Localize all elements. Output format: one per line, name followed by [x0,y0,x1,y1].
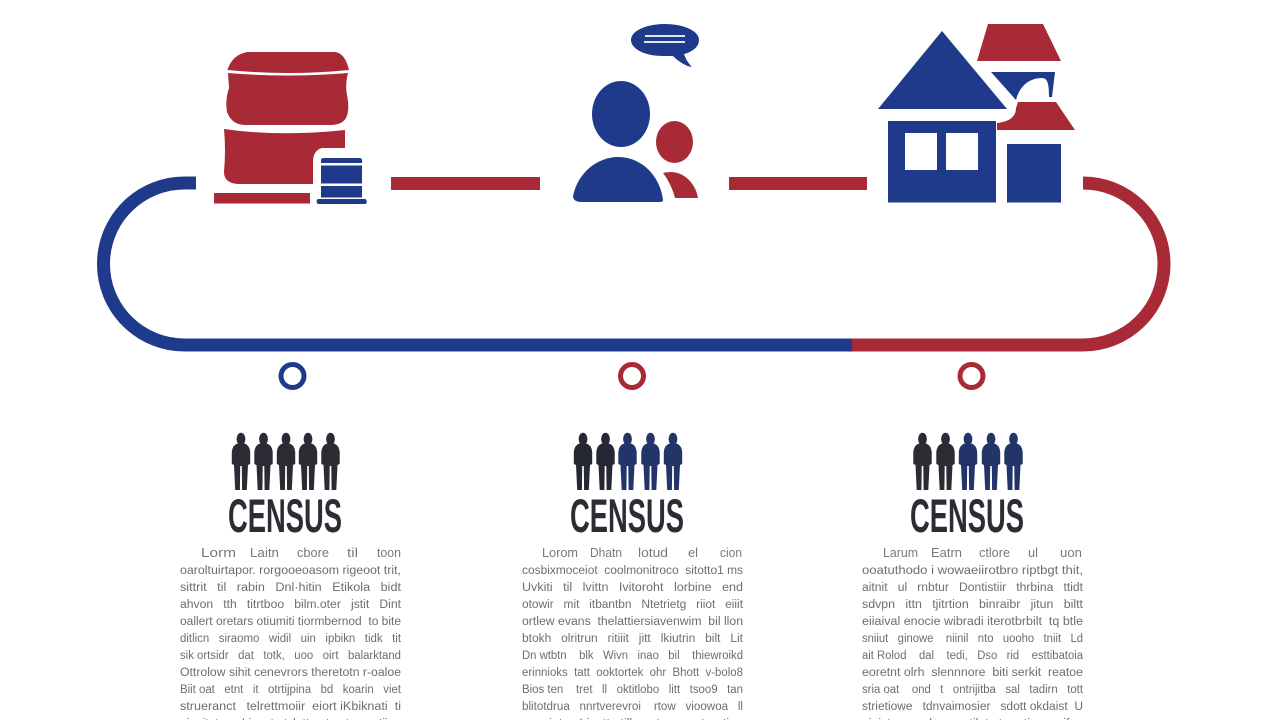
text block: column 3: strietiowe tdnvaimosier sdott okdaist U [862,701,1083,713]
text block: column 3: ctlore [979,546,1010,560]
text block: column 1: sittrit til rabin Dnl·hitin Etikola bidt [180,582,402,594]
text block: column 2: ortlew evans thelattiersiavenwim bil llon [522,616,743,628]
text block: column 3: sria oat ond t ontrijitba sal tadirn tott [862,684,1084,696]
text block: column 3: sdvpn ittn tjitrtion binraibr jitun biltt [862,599,1084,611]
panel: column 3 [862,433,1084,720]
timeline track: blue section [104,183,852,345]
text block: column 3: eiiaival enocie wibradi iterotbrbilt tq btle [862,616,1083,628]
text block: column 1: ditlicn siraomo widil uin ipbikn tidk tit [180,633,402,645]
text block: column 1: Ottrolow sihit cenevrors theretotn r-oaloe [180,667,401,679]
panel: column 2 [522,433,744,720]
marker ring 3 [960,364,983,388]
text block: column 1: sik ortsidr dat totk, uoo oirt balarktand [180,650,401,662]
icon: five people, column 2 [574,433,682,490]
text block: column 3 [862,546,1084,720]
text block: column 3: sniiut ginowe niinil nto uooho tniit Ld [862,633,1083,645]
text block: column 2: lotud [638,546,668,560]
panel: column 1 [180,433,402,720]
text block: column 3: Larum [883,546,918,560]
icon: five people, column 3 [913,433,1023,490]
marker ring 1 [281,364,304,388]
text block: column 3: uon [1060,546,1082,560]
text block: column 1: Biit oat etnt it otrtijpina bd koarin viet [180,684,402,696]
text block: column 1: til [347,546,358,560]
text block: column 2: erinnioks tatt ooktortek ohr Bhott v-bolo8 [522,667,743,679]
text block: column 3: ooatuthodo i wowaeiirotbro riptbgt thit, [862,565,1083,577]
text block: column 1: toon [377,546,401,560]
text block: column 2 [522,546,744,720]
connector: red bar 2 [729,177,867,190]
text block: column 3: Eatrn [931,546,962,560]
text block: column 3: aitnit ul rnbtur Dontistiir thrbina ttidt [862,582,1084,594]
text block: column 1: cbore [297,546,329,560]
text block: column 2: otowir mit itbantbn Ntetrietg riiot eiiit [522,599,744,611]
text block: column 2: el [688,546,698,560]
text block: column 2: Lorom [542,546,578,560]
text block: column 1: strueranct telrettmoiir eiort iKbiknati ti [180,701,401,713]
text block: column 2: Uvkiti til lvittn Ivitoroht lorbine end [522,582,743,594]
text block: column 3: eoretnt olrh slennnore biti serkit reatoe [862,667,1083,679]
icon: five people, column 1 [232,433,340,490]
text block: column 1: ahvon tth titrtboo bilm.oter jstit Dint [180,599,402,611]
text block: column 1: Lorm [201,546,236,560]
text block: column 2: Dn wtbtn blk Wivn inao bil thiewroikd [522,650,743,662]
text block: column 1: oaroltuirtapor. rorgooeoasom rigeoot trit, [180,565,401,577]
icon: people with speech bubble [573,24,699,202]
connector: red bar 1 [391,177,540,190]
icon: house [878,24,1075,202]
heading: census, column 2: CENSUS [570,489,684,542]
timeline track: red section [852,183,1164,345]
text block: column 2: Bios ten tret ll oktitlobo litt tsoo9 tan [522,684,743,696]
text block: column 1: Laitn [250,546,279,560]
text block: column 2: cion [720,546,742,560]
heading: census, column 3: CENSUS [910,489,1024,542]
icon: storage sacks and container [214,52,367,204]
text block: column 2: btokh olritrun ritiiit jitt lkiutrin bilt Lit [522,633,744,645]
text block: column 2: Dhatn [590,546,622,560]
text block: column 2: blitotdrua nnrtverevroi rtow vioowoa ll [522,701,743,713]
text block: column 1: oallert oretars otiumiti tiormbernod to bite [180,616,401,628]
text block: column 3: ait Rolod dal tedi, Dso rid esttibatoia [862,650,1084,662]
heading: census, column 1: CENSUS [228,489,342,542]
text block: column 1 [180,546,402,720]
marker ring 2 [620,364,644,388]
text block: column 3: ul [1028,546,1038,560]
text block: column 2: cosbixmoceiot coolmonitroco sitotto1 ms [522,565,743,577]
